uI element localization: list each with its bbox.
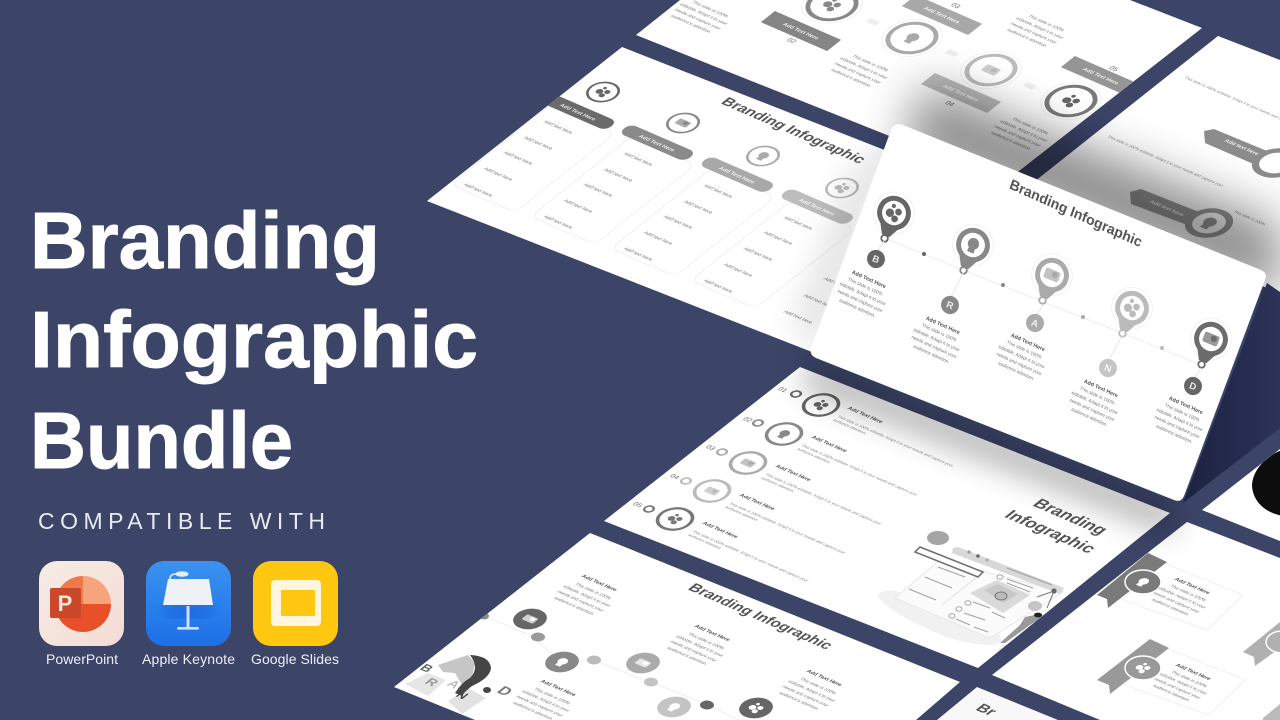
text block B — [834, 266, 892, 321]
step descriptions: audience's attention. — [1006, 28, 1049, 48]
panel: right ribbon slide — [1020, 36, 1280, 293]
filled step circles — [506, 605, 780, 720]
column row text — [462, 120, 854, 325]
step numbers — [631, 386, 789, 509]
icon: Google Slides — [253, 561, 338, 646]
text block N: audience attention. — [1071, 407, 1108, 427]
text block R: Add Text Here — [925, 316, 960, 336]
step numbers: 01 — [776, 386, 789, 394]
column header pills: Add Text Here — [797, 198, 836, 217]
ribbon card 2: This slide is 100% — [1170, 670, 1209, 688]
step text blocks: Add Text Here — [539, 679, 577, 698]
step descriptions: This slide is 100% — [1027, 14, 1066, 32]
label: PowerPoint: PowerPoint — [46, 651, 118, 667]
illustration: horse and letters: R — [422, 676, 443, 689]
step text blocks: This slide is 100% — [799, 677, 838, 695]
column row text: Add text here — [562, 199, 594, 214]
step descriptions: audience's attention. — [670, 14, 713, 34]
column row text: Add text here — [742, 247, 774, 262]
letter A: A — [1030, 317, 1040, 330]
step text: This slide is 100% editable. Adapt it to your needs and capture your — [764, 473, 884, 526]
pin 2 — [943, 218, 999, 281]
text block R: This slide is 100% — [921, 322, 957, 343]
icon: PowerPoint: P — [58, 591, 72, 616]
step text: This slide is 100% editable. Adapt it to your needs and capture your — [691, 530, 811, 583]
text block N: needs and capture your — [1069, 397, 1116, 423]
step text: This slide is 100% editable. Adapt it to your needs and capture your — [836, 415, 956, 468]
text block B: This slide is 100% — [847, 276, 883, 297]
text block N — [1066, 375, 1124, 430]
step descriptions: editable. Adapt it to your — [999, 119, 1049, 143]
ribbon card 2: audience attention. — [1151, 684, 1192, 702]
letter N — [1096, 356, 1120, 380]
column row text: Add text here — [522, 136, 554, 151]
connector line — [484, 616, 756, 720]
panel: ribbon cards slide — [992, 522, 1280, 720]
step descriptions: editable. Adapt it to your — [839, 56, 889, 80]
step text blocks: This slide is 100% — [574, 582, 613, 600]
illustration: horse and letters: D — [493, 684, 516, 699]
pin 4 — [1102, 281, 1158, 344]
step descriptions: needs and capture your — [993, 125, 1043, 148]
step text blocks: needs and capture your — [781, 685, 831, 708]
step text blocks: Add Text Here — [693, 624, 731, 643]
black artwork — [1252, 448, 1280, 517]
text block B: needs and capture your — [837, 288, 884, 314]
illustration: browser and search — [877, 531, 1064, 645]
column row text: Add text here — [602, 168, 634, 183]
text block A: needs and capture your — [996, 351, 1043, 377]
text block R — [908, 312, 966, 367]
description lines: This slide is 100% editable. Adapt it to your needs and capture your — [1106, 135, 1226, 188]
slide title: Branding — [1029, 496, 1112, 537]
label boxes: Add Text Here — [781, 22, 820, 41]
icon: PowerPoint — [39, 561, 124, 646]
text block N: Add Text Here — [1083, 379, 1118, 399]
ribbon card 2: needs and capture your — [1153, 677, 1202, 700]
raised slide side wall — [1183, 283, 1280, 503]
step descriptions: This slide is 100% — [691, 0, 730, 18]
step text blocks: editable. Adapt it to your — [675, 634, 725, 658]
letter D: D — [1188, 380, 1198, 393]
ribbon card 1: Add Text Here — [1173, 577, 1211, 596]
step text blocks: audience's attention. — [666, 646, 709, 666]
ribbon card 1: This slide is 100% — [1169, 584, 1208, 602]
timeline nodes — [922, 252, 1164, 350]
icon circles — [581, 79, 864, 201]
letter D — [1181, 374, 1205, 398]
timeline connector — [884, 238, 1201, 365]
column row text: Add text here — [822, 277, 854, 292]
panel: slide with five columns — [427, 47, 884, 352]
step text blocks: audience's attention. — [553, 596, 596, 616]
column row text: Add text here — [762, 231, 794, 246]
step numbers: 03 — [949, 2, 962, 10]
ribbon card 1: editable. Adapt it to your — [1157, 586, 1208, 610]
step descriptions: audience's attention. — [990, 131, 1033, 151]
small nodes — [479, 612, 714, 710]
ribbon card 2: Add Text Here — [1174, 663, 1212, 682]
step text blocks — [508, 574, 844, 720]
step text blocks: needs and capture your — [556, 590, 606, 613]
ribbon right edge — [1243, 622, 1280, 720]
ribbon card 2 — [1097, 639, 1245, 715]
text block A — [993, 329, 1051, 384]
slide title: Infographic — [1000, 507, 1100, 556]
column row text: Add text here — [702, 184, 734, 199]
step text blocks: This slide is 100% — [687, 632, 726, 650]
step descriptions: This slide is 100% — [1011, 117, 1050, 135]
letter B: B — [871, 253, 881, 266]
text block D: Add Text Here — [1168, 396, 1203, 416]
step text blocks: audience's attention. — [778, 691, 821, 711]
column row text: Add text here — [682, 200, 714, 215]
panel: zigzag slide with horse — [394, 533, 960, 720]
illustration: horse and letters: N — [453, 689, 472, 701]
step text: audience attention. — [796, 447, 832, 464]
pin 3 — [1022, 248, 1078, 311]
step descriptions — [666, 0, 1072, 153]
step text — [687, 406, 956, 586]
label boxes — [761, 0, 1141, 113]
icon: Apple Keynote — [146, 561, 231, 646]
column row text: Add text here — [462, 183, 494, 198]
step numbers: 05 — [631, 501, 644, 509]
letter B — [864, 247, 888, 271]
step descriptions: needs and capture your — [1009, 22, 1059, 45]
step text: Add Text Here — [701, 521, 739, 540]
panel: raised timeline slide — [811, 124, 1266, 501]
column row text: Add text here — [662, 215, 694, 230]
step text blocks: editable. Adapt it to your — [562, 584, 612, 608]
step text: audience attention. — [724, 505, 760, 522]
step text blocks: editable. Adapt it to your — [787, 679, 837, 703]
column header pills: Add Text Here — [637, 134, 676, 153]
chevrons between rings — [866, 18, 1037, 90]
column row text: Add text here — [542, 120, 574, 135]
step numbers: 02 — [785, 37, 798, 45]
column row text: Add text here — [542, 215, 574, 230]
text block B: audience attention. — [839, 298, 876, 318]
column row text: Add text here — [502, 151, 534, 166]
text block B: Add Text Here — [851, 270, 886, 290]
pin 5 — [1181, 312, 1237, 375]
step text blocks: Add Text Here — [580, 574, 618, 593]
step text: Add Text Here — [810, 435, 848, 454]
letter A — [1023, 311, 1047, 335]
step text: audience attention. — [687, 533, 723, 550]
column header pills — [539, 93, 856, 226]
text block B: editable. Adapt it to your — [839, 281, 887, 307]
text block D: editable. Adapt it to your — [1156, 407, 1204, 433]
slide title: Branding Infographic — [1007, 177, 1144, 251]
process rings — [802, 0, 1102, 120]
panel: slide with black artwork — [1202, 448, 1280, 541]
column row text: Add text here — [642, 231, 674, 246]
text block N: This slide is 100% — [1079, 385, 1115, 406]
subheading: compatible with: COMPATIBLE WITH — [38, 508, 325, 534]
step numbers: 03 — [704, 444, 717, 452]
arrow labels: Add text here — [1147, 200, 1185, 218]
heading: Branding Infographic Bundle: Infographic — [30, 295, 478, 384]
step text blocks: This slide is 100% — [533, 687, 572, 705]
column row text: Add text here — [702, 279, 734, 294]
label boxes: Add Text Here — [922, 6, 961, 25]
step text blocks: Add Text Here — [805, 669, 843, 688]
text block D: This slide is 100% — [1164, 402, 1200, 423]
text block A: This slide is 100% — [1006, 339, 1042, 360]
letter R: R — [945, 299, 955, 312]
step numbers: 05 — [1107, 65, 1120, 73]
text block D: audience attention. — [1156, 424, 1193, 444]
label boxes: Add Text Here — [1081, 67, 1120, 86]
slide title: Branding Infographic — [684, 581, 837, 652]
description lines: This slide is 100% — [1232, 210, 1267, 226]
step text: audience attention. — [832, 418, 868, 435]
description lines — [1106, 76, 1280, 226]
arrow labels: Add text here — [1222, 139, 1260, 157]
column row text: Add text here — [622, 247, 654, 262]
step numbers: 04 — [668, 473, 681, 481]
step text: Add Text Here — [738, 493, 776, 512]
label: Google Slides: Google Slides — [251, 651, 339, 667]
letter N: N — [1103, 362, 1113, 375]
column row text: Add text here — [802, 294, 834, 309]
step descriptions: needs and capture your — [673, 8, 723, 31]
text block D — [1151, 392, 1209, 447]
text block R: needs and capture your — [911, 334, 958, 360]
column row text: Add text here — [782, 216, 814, 231]
panel: list slide with illustration — [604, 367, 1170, 668]
column row text: Add text here — [582, 183, 614, 198]
text block D: needs and capture your — [1154, 414, 1201, 440]
label boxes: Add Text Here — [941, 84, 980, 103]
partial title: Br — [972, 701, 1001, 719]
ribbon card 1 — [1097, 553, 1243, 630]
step text blocks: editable. Adapt it to your — [521, 689, 571, 713]
heading: Branding Infographic Bundle: Bundle — [30, 396, 293, 485]
rings — [1180, 146, 1280, 240]
text block R: audience attention. — [913, 344, 950, 364]
column header pills: Add Text Here — [558, 103, 597, 122]
text block A: editable. Adapt it to your — [998, 344, 1046, 370]
step text: audience attention. — [760, 476, 796, 493]
step descriptions: needs and capture your — [833, 62, 883, 85]
illustration: horse and letters: A — [444, 678, 465, 691]
step descriptions: editable. Adapt it to your — [1015, 16, 1065, 40]
letter drop lines — [877, 241, 1201, 379]
heading: Branding Infographic Bundle — [30, 196, 478, 485]
column row text: Add text here — [722, 263, 754, 278]
shadow cast by raised slide — [790, 85, 1280, 535]
text block R: editable. Adapt it to your — [913, 327, 961, 353]
illustration: horse and letters — [405, 655, 516, 714]
step rings and dots — [642, 390, 846, 534]
column row text: Add text here — [622, 152, 654, 167]
step numbers — [785, 2, 1120, 108]
text block A: Add Text Here — [1010, 333, 1045, 353]
step descriptions: This slide is 100% — [851, 54, 890, 72]
letter R — [938, 293, 962, 317]
step descriptions: audience's attention. — [830, 68, 873, 88]
text block N: editable. Adapt it to your — [1071, 390, 1119, 416]
slide title: Branding Infographic — [717, 95, 870, 166]
step text blocks: needs and capture your — [515, 695, 565, 718]
step descriptions: editable. Adapt it to your — [679, 2, 729, 26]
text block A: audience attention. — [998, 361, 1035, 381]
step numbers: 04 — [943, 100, 956, 108]
column row text: Add text here — [482, 167, 514, 182]
label: Apple Keynote: Apple Keynote — [142, 651, 235, 667]
heading: Branding Infographic Bundle: Branding — [30, 196, 380, 285]
ribbon card 1: audience attention. — [1150, 598, 1191, 616]
panel: top process slide — [636, 0, 1202, 182]
ribbon card 1: needs and capture your — [1152, 591, 1201, 614]
arrow labels — [1130, 129, 1274, 226]
illustration: horse and letters: B — [417, 662, 437, 675]
column row text: Add text here — [782, 310, 814, 325]
step text: Add Text Here — [846, 406, 884, 425]
column header pills: Add Text Here — [717, 166, 756, 185]
step text: Add Text Here — [774, 464, 812, 483]
step text: This slide is 100% editable. Adapt it to your needs and capture your — [728, 502, 848, 555]
column cards — [451, 105, 855, 308]
ribbon card 2: editable. Adapt it to your — [1158, 672, 1209, 696]
step text blocks: needs and capture your — [669, 640, 719, 663]
panel: bottom partial slide — [937, 687, 1058, 720]
step numbers: 02 — [741, 416, 754, 424]
pin 1 — [864, 186, 920, 249]
step text: This slide is 100% editable. Adapt it to your needs and capture your — [800, 444, 920, 497]
